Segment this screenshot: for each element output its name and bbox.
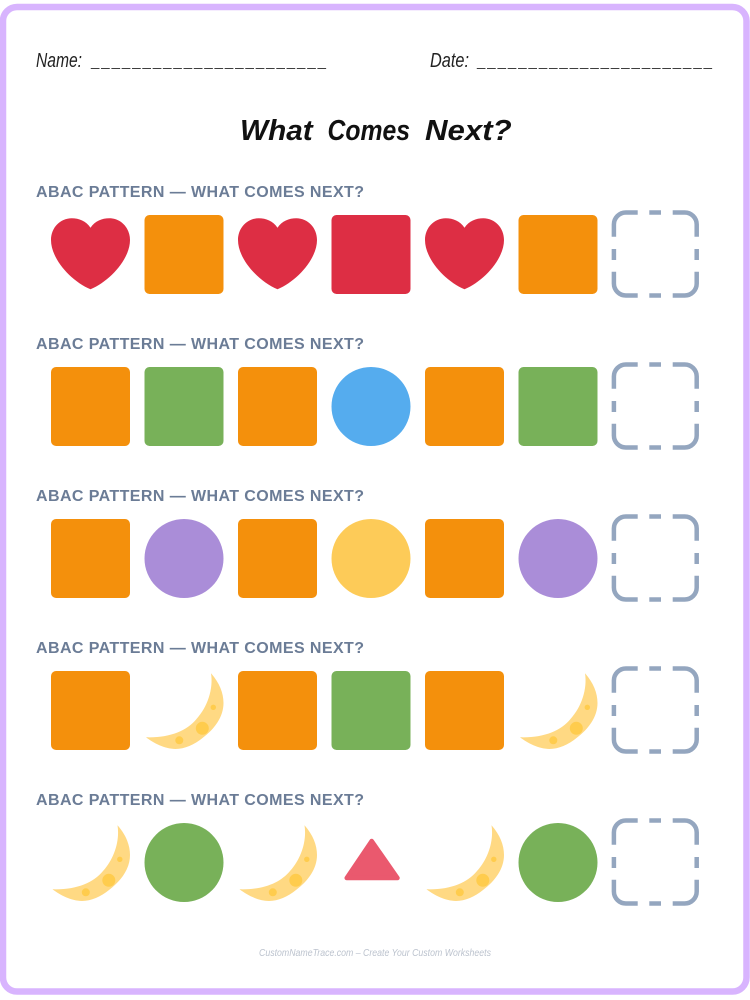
row 4: square moon pattern — [36, 640, 697, 752]
orange square — [238, 367, 317, 446]
empty answer box — [614, 516, 697, 600]
orange square — [51, 367, 130, 446]
row 5: moon circle triangle pattern — [36, 792, 697, 904]
crescent moon — [520, 673, 598, 749]
empty answer box — [614, 212, 697, 296]
green circle — [518, 823, 598, 902]
row 1: heart square pattern — [36, 184, 697, 296]
crescent moon — [426, 825, 504, 901]
orange square — [238, 519, 317, 598]
date field — [430, 50, 713, 72]
orange square — [425, 671, 504, 750]
title: Comes — [328, 115, 410, 147]
orange square — [238, 671, 317, 750]
date field: Date: — [430, 50, 469, 72]
row 3: square circle pattern — [36, 488, 697, 600]
red square — [332, 215, 410, 294]
yellow circle — [332, 519, 410, 598]
crescent moon — [240, 825, 317, 901]
name field — [36, 50, 327, 72]
orange square — [518, 215, 598, 294]
red triangle — [347, 841, 398, 878]
empty answer box — [614, 820, 697, 904]
orange square — [425, 519, 504, 598]
crescent moon — [146, 673, 224, 749]
name field: _______________________ — [90, 53, 327, 70]
empty answer box — [614, 668, 697, 752]
title: What — [240, 115, 314, 147]
row 4 heading: ABAC PATTERN — WHAT COMES NEXT? — [36, 640, 364, 657]
orange square — [51, 671, 130, 750]
green square — [332, 671, 410, 750]
orange square — [425, 367, 504, 446]
footer: CustomNameTrace.com – Create Your Custom Worksheets — [259, 948, 491, 959]
row 2: square pattern — [36, 336, 697, 448]
row 1 heading: ABAC PATTERN — WHAT COMES NEXT? — [36, 184, 364, 201]
name field: Name: — [36, 50, 82, 72]
blue circle — [332, 367, 410, 446]
purple circle — [144, 519, 224, 598]
row 3 heading: ABAC PATTERN — WHAT COMES NEXT? — [36, 488, 364, 505]
row 5 heading: ABAC PATTERN — WHAT COMES NEXT? — [36, 792, 364, 809]
purple circle — [518, 519, 598, 598]
empty answer box — [614, 364, 697, 448]
green square — [518, 367, 598, 446]
orange square — [51, 519, 130, 598]
green circle — [144, 823, 224, 902]
title: Next? — [425, 115, 512, 147]
heart — [51, 218, 130, 289]
orange square — [144, 215, 224, 294]
date field: _______________________ — [476, 53, 713, 70]
heart — [425, 218, 504, 289]
row 2 heading: ABAC PATTERN — WHAT COMES NEXT? — [36, 336, 364, 353]
crescent moon — [52, 825, 130, 901]
heart — [238, 218, 317, 289]
green square — [144, 367, 224, 446]
